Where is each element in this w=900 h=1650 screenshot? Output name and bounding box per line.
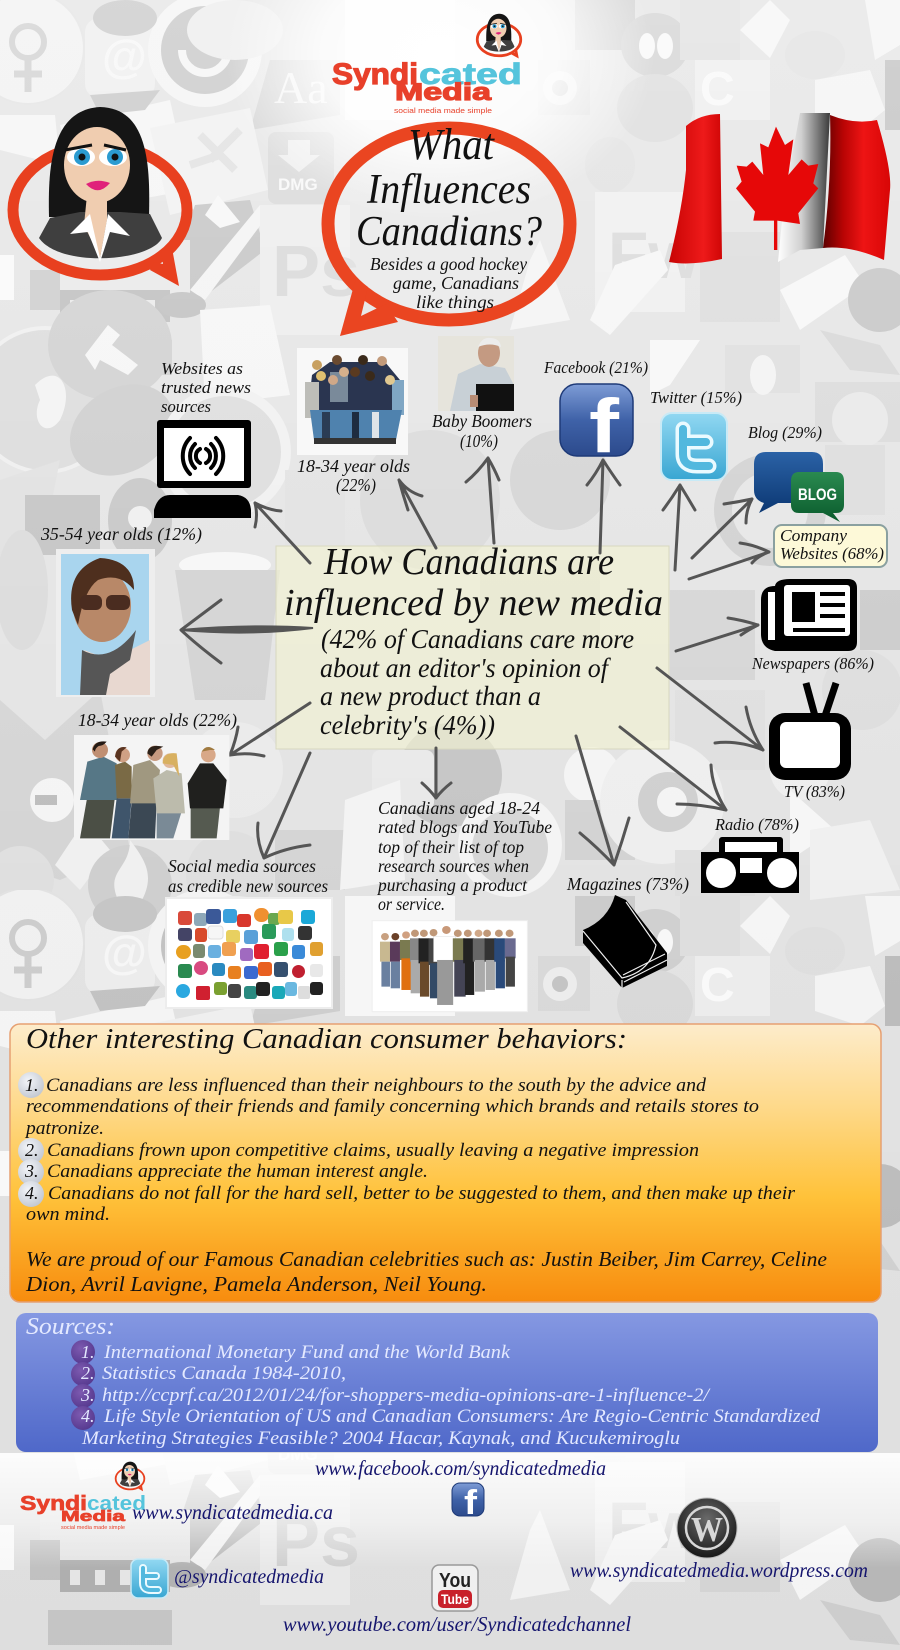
- link: YouTube: www.youtube.com/user/Syndicatedchannel: [283, 1612, 631, 1636]
- celebrities paragraph: We are proud of our Famous Canadian celebrities such as: Justin Beiber, Jim Carrey, Celine: [26, 1247, 827, 1271]
- icon: blog speech bubbles: [754, 452, 844, 522]
- panel heading: Other interesting Canadian consumer behaviors:: [26, 1024, 627, 1055]
- footer logo: Media: [61, 1508, 126, 1525]
- text: baby boomers 10%: [432, 411, 532, 452]
- icon: magazines stack: [583, 895, 667, 988]
- label: Twitter 15%: Twitter (15%): [650, 388, 742, 407]
- text: Canadians aged 18-24: rated blogs and YouTube: [378, 817, 552, 837]
- callout: company websites 68%: Websites (68%): [780, 544, 884, 563]
- link: website: www.syndicatedmedia.ca: [132, 1500, 333, 1524]
- icon: WordPress: W: [691, 1510, 723, 1549]
- photo: crowd of young Canadians: [372, 921, 527, 1012]
- icon: YouTube: You: [439, 1570, 471, 1592]
- sources list: 2.: [81, 1363, 94, 1383]
- numbered list: Canadians frown upon competitive claims, usually leaving a negative impression: [47, 1140, 699, 1161]
- logo: Syndicated Media: [332, 14, 522, 115]
- text: Canadians aged 18-24: [376, 798, 552, 914]
- icon: avatar in speech bubble: [13, 107, 187, 286]
- numbered list: 2.: [25, 1140, 38, 1160]
- text: social media sources: [168, 856, 328, 896]
- text: Canadians aged 18-24: or service.: [378, 894, 445, 914]
- numbered list: own mind.: [26, 1204, 110, 1225]
- callout: company websites 68%: [774, 525, 887, 567]
- panel heading: influenced by new media: [284, 582, 663, 624]
- label: Facebook 21%: Facebook (21%): [543, 358, 648, 377]
- sources list: 3.: [80, 1385, 94, 1405]
- panel: sources: [16, 1313, 878, 1452]
- sources list: 4.: [81, 1406, 94, 1426]
- sources list: 1.: [81, 1342, 94, 1362]
- panel: other consumer behaviors: [10, 1024, 881, 1302]
- title: Canadians?: [356, 209, 542, 255]
- panel body: celebrity's (4%)): [320, 710, 495, 740]
- numbered list: patronize.: [24, 1118, 104, 1139]
- icon: TV: [769, 683, 851, 780]
- link: Facebook: www.facebook.com/syndicatedmedia: [315, 1456, 606, 1480]
- text: Canadians aged 18-24: Canadians aged 18-24: [378, 798, 540, 818]
- numbered list: Canadians appreciate the human interest angle.: [47, 1161, 428, 1182]
- icon: Canadian flag: [669, 113, 890, 263]
- logo: Syndicated Media: social media made simple: [394, 106, 492, 115]
- icon: small Facebook: [452, 1483, 484, 1522]
- numbered list: Canadians are less influenced than their neighbours to the south by the advice and: [46, 1075, 707, 1096]
- celebrities paragraph: Dion, Avril Lavigne, Pamela Anderson, Neil Young.: [25, 1272, 487, 1296]
- text: 18-34 year olds 22%: 18-34 year olds: [297, 456, 410, 476]
- text: 18-34 year olds 22%: [297, 456, 410, 496]
- panel body: [320, 624, 634, 740]
- text: baby boomers 10%: Baby Boomers: [432, 411, 532, 431]
- subtitle: like things: [416, 292, 494, 312]
- label: Radio 78%: Radio (78%): [714, 815, 799, 834]
- footer logo: cated: [87, 1493, 146, 1515]
- numbered list: recommendations of their friends and family concerning which brands and retails stores to: [26, 1096, 759, 1117]
- logo: Syndicated Media: cated: [419, 58, 522, 91]
- icon: WordPress: [677, 1498, 737, 1558]
- label: 35-54 year olds 12%: 35-54 year olds (12%): [40, 524, 202, 545]
- sources list: Statistics Canada 1984-2010,: [102, 1363, 346, 1384]
- subtitle: Besides a good hockey: [370, 254, 527, 274]
- text: Canadians aged 18-24: purchasing a product: [376, 875, 528, 895]
- photo: five young adults: [74, 735, 229, 840]
- numbered list: 4.: [25, 1183, 38, 1203]
- photo: group of 18-34 year olds: [297, 348, 408, 455]
- logo: Syndicated Media: Media: [395, 79, 492, 106]
- text: baby boomers 10%: (10%): [460, 431, 498, 452]
- numbered list: [18, 1072, 796, 1225]
- icon: radio: [701, 837, 799, 893]
- title: Influences: [366, 167, 531, 213]
- speech bubble: title: [328, 120, 570, 336]
- icon: laptop with signal: [154, 420, 251, 518]
- footer logo: Syndi: [20, 1493, 87, 1515]
- arrows from panel to each media: [181, 458, 769, 865]
- icon: Twitter: [661, 413, 727, 480]
- celebrities paragraph: [25, 1247, 827, 1296]
- sources list: http://ccprf.ca/2012/01/24/for-shoppers-media-opinions-are-1-influence-2/: [102, 1385, 711, 1406]
- label: Newspapers 86%: Newspapers (86%): [751, 654, 874, 673]
- subtitle: game, Canadians: [393, 273, 519, 293]
- numbered list: 3.: [24, 1161, 38, 1181]
- panel heading: How Canadians are: [323, 541, 614, 583]
- text: websites as trusted news sources: Websites as: [161, 359, 243, 378]
- text: websites as trusted news sources: trusted news: [161, 378, 251, 397]
- icon: newspaper: [761, 579, 857, 651]
- callout: company websites 68%: Company: [780, 526, 847, 545]
- label: TV 83%: TV (83%): [784, 782, 845, 801]
- subtitle: [370, 254, 527, 312]
- panel body: a new product than a: [320, 681, 541, 711]
- icon: small Twitter: [131, 1559, 168, 1598]
- text: Canadians aged 18-24: top of their list of top: [378, 837, 524, 857]
- label: Blog 29%: Blog (29%): [748, 423, 822, 442]
- label: Magazines 73%: Magazines (73%): [566, 874, 689, 895]
- numbered list: 1.: [25, 1075, 38, 1095]
- text: websites as trusted news sources: sources: [161, 397, 211, 416]
- photo: baby boomer with laptop: [438, 336, 514, 411]
- panel body: about an editor's opinion of: [320, 653, 611, 683]
- sources list: [71, 1340, 821, 1449]
- panel: how Canadians are influenced: [276, 541, 669, 749]
- icon: blog speech bubbles: BLOG: [798, 485, 837, 504]
- icon: small Facebook: f: [464, 1484, 478, 1522]
- sources list: Life Style Orientation of US and Canadian Consumers: Are Regio-Centric Standardized: [103, 1406, 821, 1427]
- text: websites as trusted news sources: [161, 359, 251, 416]
- sources heading: Sources:: [26, 1314, 115, 1340]
- photo: man in sunglasses: [56, 549, 155, 697]
- footer logo: [20, 1462, 146, 1531]
- footer logo: social media made simple: [61, 1525, 125, 1531]
- panel body: (42% of Canadians care more: [321, 624, 634, 654]
- text: social media sources: as credible new sources: [168, 876, 328, 896]
- link: WordPress: www.syndicatedmedia.wordpress.com: [570, 1558, 868, 1582]
- link: Twitter handle: @syndicatedmedia: [174, 1566, 324, 1588]
- icon: YouTube: Tube: [441, 1591, 469, 1607]
- image: social media icon collage: [166, 898, 332, 1008]
- text: 18-34 year olds 22%: (22%): [336, 475, 376, 496]
- text: social media sources: Social media sources: [168, 856, 316, 876]
- label: 18-34 year olds 22%: 18-34 year olds (22%): [78, 710, 237, 731]
- logo: Syndicated Media: Syndi: [332, 58, 418, 91]
- title: [356, 120, 542, 255]
- icon: Facebook: f: [589, 384, 620, 469]
- icon: Facebook: [560, 384, 633, 469]
- sources list: International Monetary Fund and the World Bank: [103, 1342, 511, 1363]
- icon: YouTube: [432, 1565, 478, 1611]
- numbered list: Canadians do not fall for the hard sell, better to be suggested to them, and then make up their: [48, 1183, 796, 1204]
- text: Canadians aged 18-24: research sources when: [378, 856, 529, 876]
- sources list: Marketing Strategies Feasible? 2004 Hacar, Kaynak, and Kucukemiroglu: [81, 1428, 680, 1449]
- title: What: [408, 120, 496, 169]
- panel heading: [284, 541, 663, 624]
